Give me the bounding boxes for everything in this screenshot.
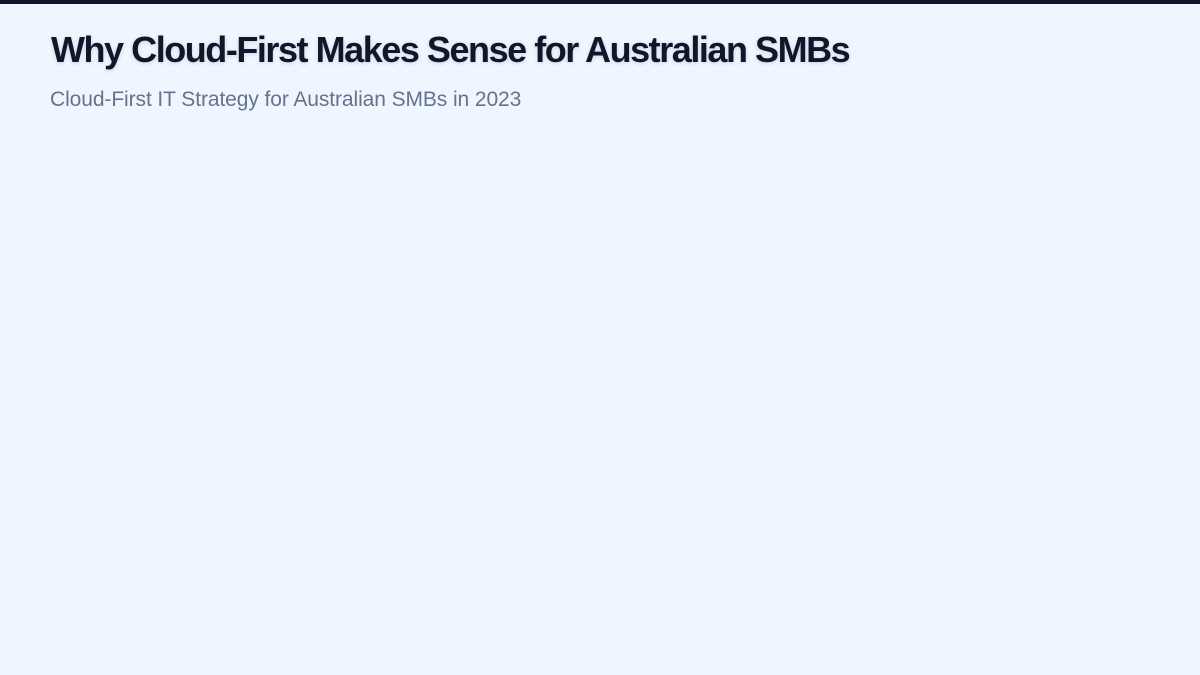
subtitle: Cloud-First IT Strategy for Australian SMBs in 2023 (50, 88, 521, 111)
top accent bar (0, 0, 1200, 4)
title: Why Cloud-First Makes Sense for Australian SMBs (51, 29, 849, 70)
